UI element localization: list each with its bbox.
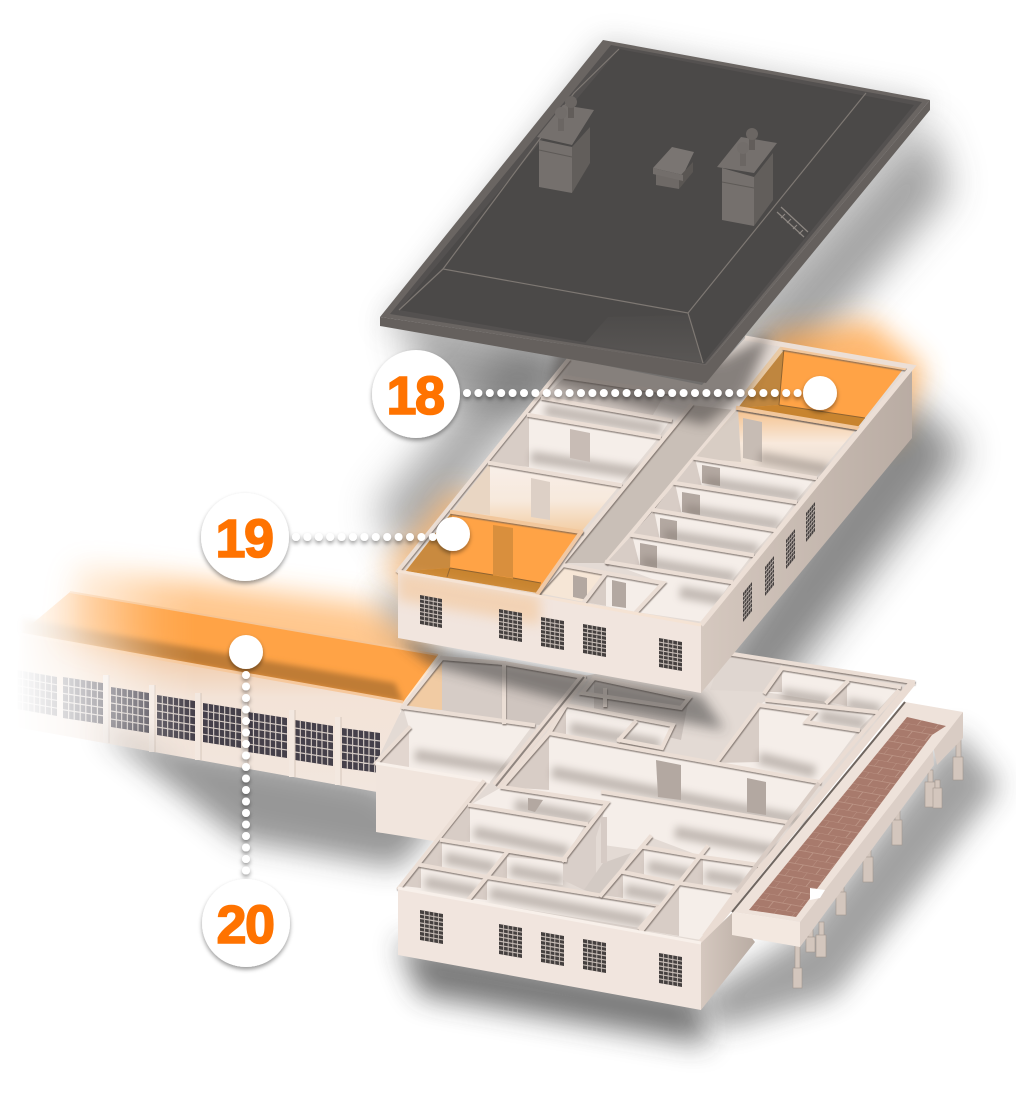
shadow cast by upper floor on lower floor bbox=[398, 640, 725, 730]
base plate bbox=[398, 338, 912, 625]
upper front wall bbox=[398, 571, 701, 693]
wing front wall bbox=[15, 634, 403, 792]
left rooms bbox=[398, 360, 670, 571]
wing windows bbox=[17, 670, 380, 785]
upper front windows bbox=[420, 595, 682, 671]
highlighted wing roof space bbox=[20, 592, 438, 702]
floor: lower level with long wing bbox=[15, 592, 913, 1010]
highlighted room 18 bbox=[738, 346, 904, 428]
right chimney bbox=[717, 128, 777, 226]
callout 19: 19 bbox=[215, 509, 273, 569]
corridor bbox=[563, 405, 734, 563]
callout 19 bbox=[201, 493, 470, 581]
centre vent box bbox=[653, 147, 694, 189]
centre small rooms bbox=[549, 678, 689, 748]
roof bbox=[380, 40, 930, 383]
left block bbox=[376, 658, 584, 842]
roof ladder bbox=[777, 207, 808, 237]
wing 20 bbox=[15, 592, 438, 792]
right double wall bbox=[701, 682, 913, 943]
roof shadow on upper floor bbox=[550, 335, 770, 425]
small front rooms bbox=[538, 565, 663, 612]
callout 18: 18 bbox=[386, 366, 444, 426]
floor: upper level bbox=[398, 338, 912, 693]
roof seams bbox=[399, 49, 866, 363]
highlighted room 19 bbox=[406, 512, 581, 593]
right back rooms bbox=[710, 652, 913, 782]
lower front wall bbox=[398, 888, 755, 1010]
columns bbox=[793, 735, 963, 988]
left chimney bbox=[537, 96, 594, 193]
right rooms bbox=[607, 408, 857, 622]
callout 18 bbox=[372, 350, 837, 438]
front left rooms bbox=[399, 782, 660, 928]
lower floor base bbox=[376, 650, 913, 943]
callout 20 bbox=[202, 635, 290, 967]
upper side windows bbox=[743, 502, 815, 622]
upper side wall bbox=[701, 367, 912, 693]
callout 20: 20 bbox=[216, 895, 274, 955]
big central room bbox=[496, 677, 819, 865]
balcony with brick floor and columns bbox=[732, 702, 963, 988]
front right rooms bbox=[601, 837, 759, 940]
lower front windows bbox=[420, 910, 682, 987]
